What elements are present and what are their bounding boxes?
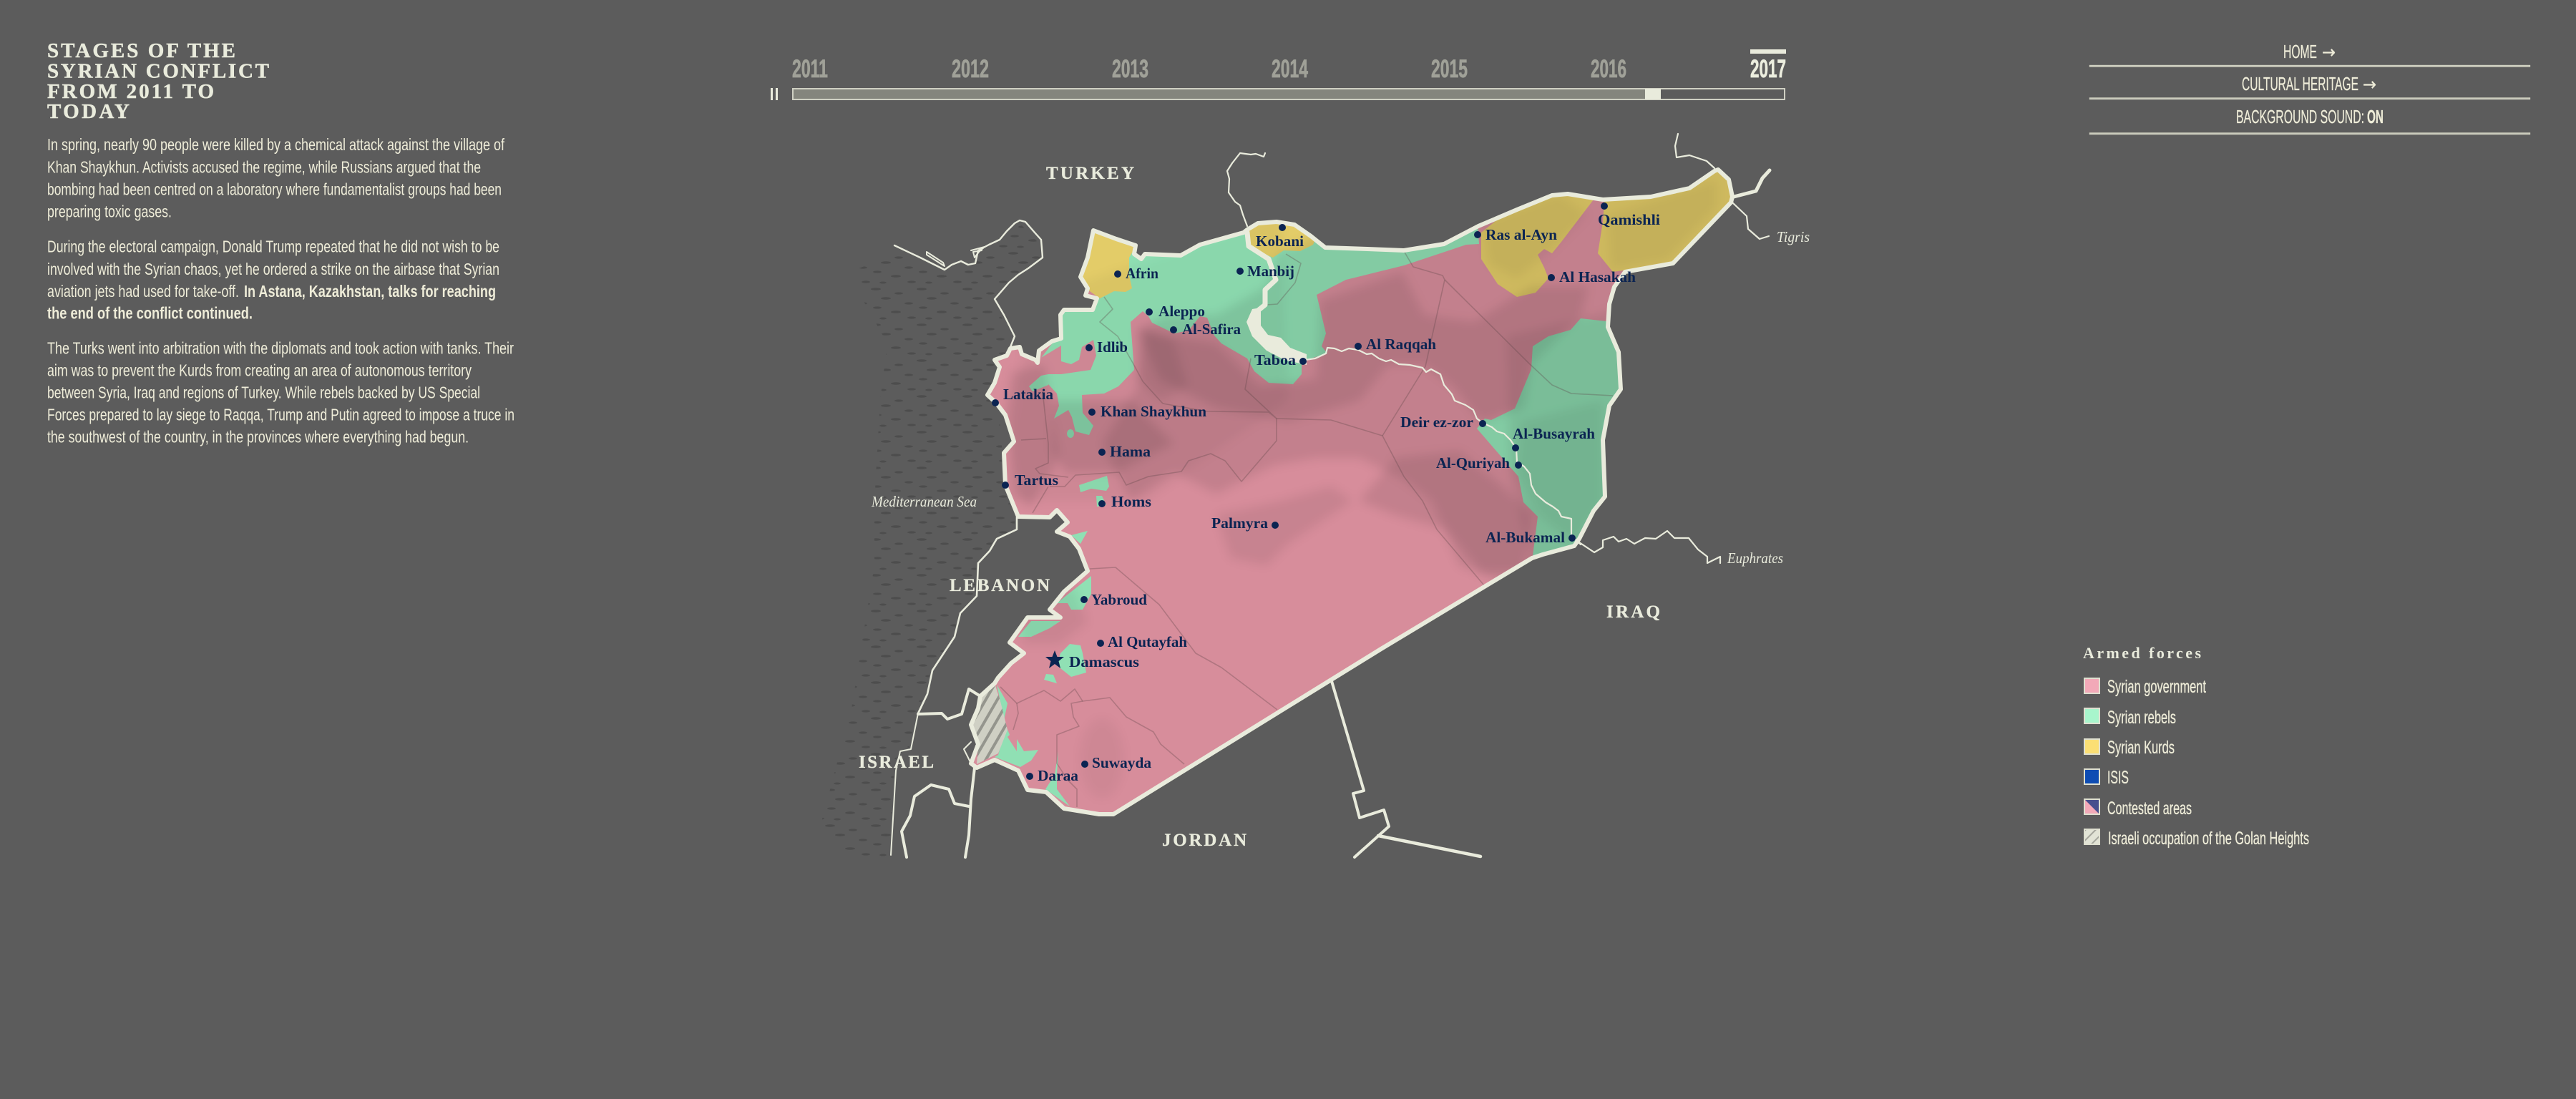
city labels: Palmyra [1211,514,1269,532]
city labels: Suwayda [1092,754,1152,771]
city labels: Tartus [1015,472,1058,489]
pause icon [771,88,778,100]
legend item: Israeli occupation of the Golan Heights [2084,829,2309,849]
label: Euphrates: Euphrates [1727,550,1783,567]
region: Syrian Kurds, Afrin [1083,233,1133,298]
legend item: Syrian rebels [2084,708,2176,728]
country labels [859,164,1660,850]
paragraph 3: Forces prepared to lay siege to Raqqa, Trump and Putin agreed to impose a truce in [47,405,514,424]
legend item: Syrian rebels: Syrian rebels [2107,708,2176,728]
icon: capital star, Damascus [1045,650,1064,668]
paragraph 2: In Astana, Kazakhstan, talks for reaching [244,282,496,301]
year labels: 2013 [1112,55,1148,83]
region: Israeli occupation of the Golan Heights [971,683,1008,764]
legend item: Contested areas [2084,798,2192,819]
Syria territory [966,150,1753,830]
region: rebels, eastern Syria [1477,318,1631,556]
region: rebel pockets, Homs [1067,429,1109,544]
city labels: Aleppo [1158,303,1205,320]
city labels: Kobani [1256,233,1304,250]
paragraph 3: The Turks went into arbitration with the diplomats and took action with tanks. Their [47,339,514,358]
city labels: Al-Quriyah [1436,454,1510,472]
paragraph 2: the end of the conflict continued. [47,303,253,322]
home link: HOME [2283,41,2317,62]
background sound toggle: ON [2367,106,2384,127]
label: Lebanon: LEBANON [950,576,1050,595]
city labels: Al-Safira [1182,321,1241,338]
river: lower Euphrates [1579,531,1720,563]
city labels: Deir ez-zor [1400,414,1473,431]
year labels: 2011 [792,55,828,83]
city labels: Al Raqqah [1366,336,1436,353]
title: TODAY [47,100,130,123]
label: Tigris: Tigris [1777,228,1810,245]
region: government pocket, Idlib [1030,340,1096,374]
title [47,39,269,123]
paragraph 1: preparing toxic gases. [47,202,172,220]
label: Iraq: IRAQ [1606,602,1660,622]
active year marker [1750,49,1786,54]
legend item: ISIS: ISIS [2107,768,2129,788]
background sound toggle: BACKGROUND SOUND: [2236,106,2364,127]
city markers [992,202,1608,780]
city labels: Daraa [1038,767,1078,784]
map [816,134,1810,859]
home link: → [2322,42,2336,62]
region: Syrian Kurds, Ras al-Ayn [1481,196,1593,297]
terrain shading [1002,150,1739,798]
cultural heritage link: CULTURAL HERITAGE [2242,73,2358,94]
legend item: Israeli occupation of the Golan Heights: Israeli occupation of the Golan Heights [2108,829,2309,849]
paragraph 2 [47,238,499,322]
city labels: Afrin [1126,265,1158,282]
city labels: Yabroud [1091,591,1147,608]
year labels [792,55,1786,83]
paragraph 1: In spring, nearly 90 people were killed by a chemical attack against the village of [47,135,504,154]
paragraph 2: involved with the Syrian chaos, yet he ordered a strike on the airbase that Syrian [47,260,499,278]
paragraph 3: between Syria, Iraq and regions of Turkey. While rebels backed by US Special [47,384,480,402]
city labels: Idlib [1097,338,1128,356]
city labels: Al Hasakah [1559,268,1636,285]
label: Jordan: JORDAN [1162,831,1246,850]
city labels [1003,211,1660,784]
legend item: Syrian government [2084,677,2206,697]
paragraph 2: During the electoral campaign, Donald Trump repeated that he did not wish to be [47,238,499,256]
region: Syrian government [973,200,1624,812]
city labels: Manbij [1247,263,1294,280]
region: Syrian Kurds, Kobani [1249,224,1314,258]
paragraph 1 [47,135,504,220]
navigation menu [2089,41,2530,135]
year labels: 2015 [1431,55,1468,83]
city labels: Al-Busayrah [1513,425,1595,442]
title: FROM 2011 TO [47,80,214,103]
background sound toggle [2236,106,2384,127]
label: Turkey: TURKEY [1046,164,1134,183]
city labels: Ras al-Ayn [1485,226,1557,243]
Syria border [971,170,1732,814]
year labels: 2014 [1272,55,1308,83]
legend item: Contested areas: Contested areas [2107,798,2192,819]
legend item: Syrian Kurds [2084,738,2175,758]
paragraph 3: the southwest of the country, in the provinces where everything had begun. [47,428,469,446]
paragraph 3: aim was to prevent the Kurds from creating an area of autonomous territory [47,361,472,379]
region: Latakia rebel pocket [1029,374,1048,391]
sea texture [816,215,1052,859]
legend item: ISIS [2084,768,2129,788]
city labels: Hama [1110,443,1151,460]
city labels: Qamishli [1598,211,1660,228]
water labels [871,228,1810,567]
paragraph 2: aviation jets had used for take-off. [47,282,239,301]
legend item: Syrian Kurds: Syrian Kurds [2107,738,2175,758]
paragraph 1: Khan Shaykhun. Activists accused the regime, while Russians argued that the [47,157,481,176]
title: STAGES OF THE [47,39,235,62]
paragraph 3 [47,339,514,446]
year labels: 2012 [952,55,989,83]
year labels: 2017 [1750,55,1786,83]
administrative boundaries [1000,251,1613,807]
city labels: Homs [1111,493,1151,510]
city labels: Latakia [1003,386,1053,403]
city labels: Khan Shaykhun [1101,403,1206,420]
paragraph 1: bombing had been centred on a laboratory where fundamentalist groups had been [47,180,502,199]
river: Tigris [1675,134,1714,168]
region: Syrian Kurds, Qamishli [1598,172,1730,272]
region: rebels along Lebanon border and Damascus [995,576,1091,806]
text block: narrative [47,135,514,446]
river: upper Euphrates [1227,153,1265,226]
cultural heritage link [2242,73,2376,94]
region: Syrian rebels, north and Idlib [1030,215,1479,435]
rivers outside Syria [1227,134,1770,563]
label: Mediterranean Sea: Mediterranean Sea [871,493,977,510]
river: Euphrates through Syria and Lake Assad [1246,233,1581,544]
neighbouring borders and coast [891,220,1480,857]
city labels: Al-Bukamal [1485,529,1565,546]
city labels: Al Qutayfah [1108,633,1187,650]
label: Israel: ISRAEL [859,753,934,772]
cultural heritage link: → [2363,74,2376,94]
timeline [771,49,1786,100]
city labels: Taboa [1254,351,1297,368]
city labels: Damascus [1069,653,1139,670]
legend: armed forces [2083,644,2309,849]
title: SYRIAN CONFLICT [47,60,269,83]
progress bar [793,89,1785,99]
legend item: Syrian government: Syrian government [2107,677,2206,697]
legend heading: Armed forces [2083,644,2201,662]
year labels: 2016 [1591,55,1626,83]
